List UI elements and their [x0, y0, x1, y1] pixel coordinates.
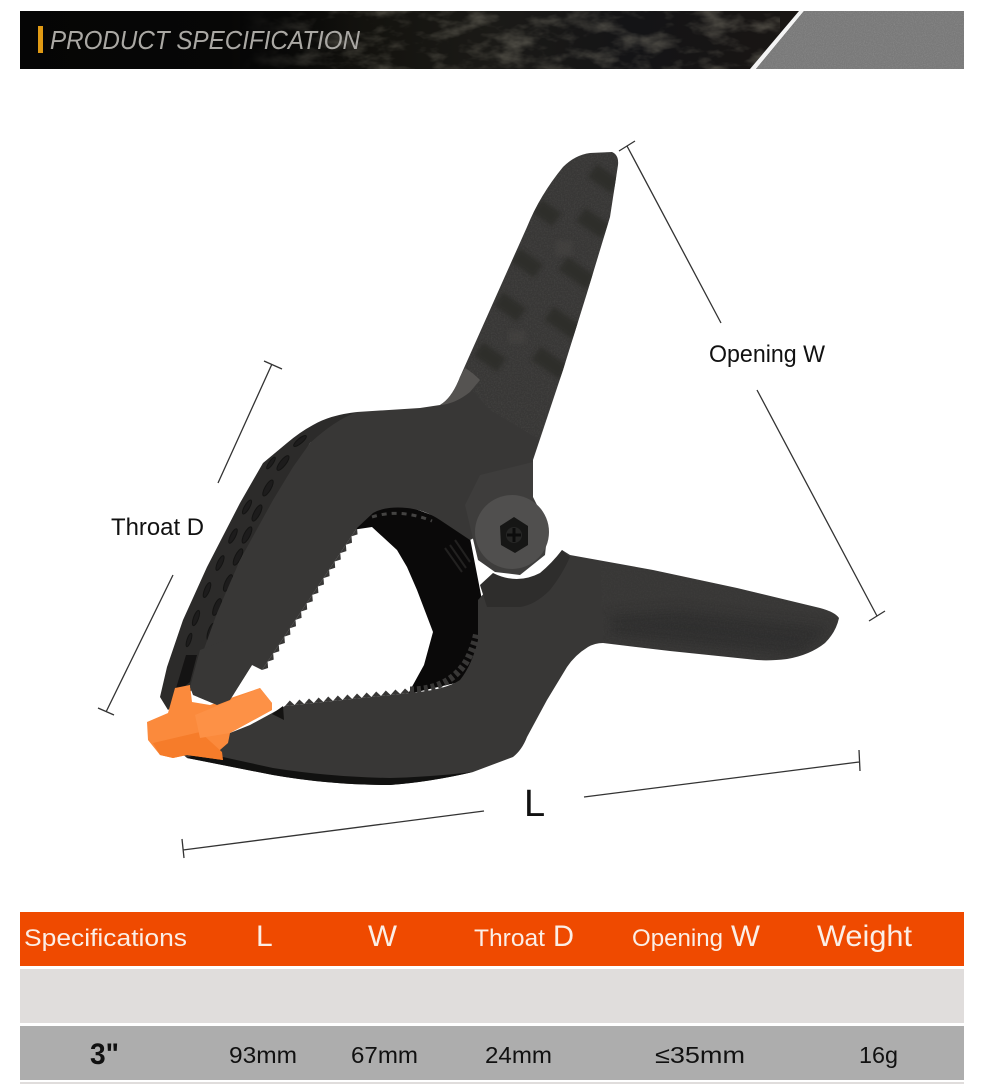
lower teeth [285, 688, 410, 706]
banner title: PRODUCT SPECIFICATION [50, 25, 360, 55]
table header row: L [256, 920, 273, 953]
table header row: Throat [474, 925, 545, 952]
dimension: opening W [619, 141, 885, 621]
spring cavity [352, 506, 482, 694]
dimension: opening W: Opening W [709, 341, 825, 368]
table header row: W [731, 920, 761, 953]
lower handle texture [615, 614, 815, 659]
collar around pivot [480, 550, 570, 607]
data row: 67mm [351, 1042, 418, 1068]
inner teeth on cavity arc [410, 632, 477, 690]
empty table row [20, 969, 964, 1023]
clamp product illustration [147, 150, 845, 785]
table header row: Specifications [24, 925, 187, 952]
table header row: Weight [817, 920, 913, 953]
spring coil [445, 540, 470, 572]
data row: 24mm [485, 1042, 552, 1068]
dimension: length L [182, 750, 860, 858]
data row [20, 1026, 964, 1080]
banner grey corner panel [750, 11, 964, 69]
table header row: W [368, 920, 398, 953]
handle grip texture [466, 152, 618, 438]
table header row: Opening [632, 925, 723, 952]
pivot with screw [465, 462, 549, 575]
table header row [20, 912, 964, 966]
back jaw with grip dimples [160, 412, 357, 710]
header banner [20, 11, 964, 69]
banner accent bar [38, 26, 43, 53]
data row: 3" [90, 1038, 119, 1071]
upper teeth [262, 528, 358, 670]
data row: 16g [859, 1042, 898, 1068]
table header row: D [553, 920, 574, 953]
upper jaw and upper handle [192, 150, 630, 705]
dimension: throat D: Throat D [111, 514, 204, 541]
data row: ≤35mm [655, 1042, 745, 1068]
orange tip [147, 640, 272, 760]
dimension: length L: L [524, 783, 545, 825]
specification table [20, 912, 964, 1084]
data row: 93mm [229, 1042, 297, 1068]
lower jaw and lower handle [172, 550, 845, 785]
dimension: throat D [98, 361, 282, 715]
